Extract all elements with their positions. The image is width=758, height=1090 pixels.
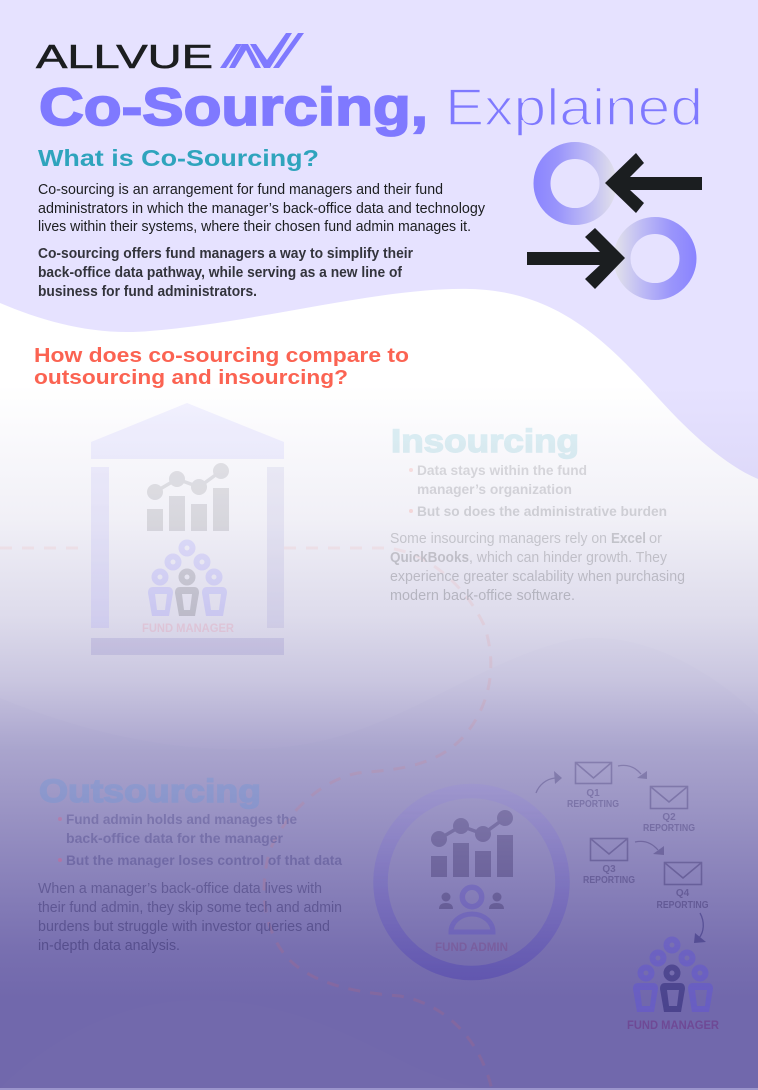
insourcing bullets: But so does the administrative burden <box>417 503 667 519</box>
outsourcing paragraph: in-depth data analysis. <box>38 938 180 954</box>
icon: fund admin ring <box>374 832 570 980</box>
outsourcing bullets: But the manager loses control of that data <box>66 852 342 868</box>
arrow: Q3 to Q4 <box>635 841 664 855</box>
outsourcing bullets: Fund admin holds and manages the <box>66 811 297 827</box>
bold paragraph <box>38 246 413 300</box>
outsourcing paragraph: burdens but struggle with investor queries and <box>38 919 330 935</box>
insourcing paragraph: , which can hinder growth. They <box>469 550 668 566</box>
icon: ring with inward arrow <box>542 150 702 216</box>
outsourcing paragraph <box>38 881 342 954</box>
icon: fund admin people <box>439 887 504 932</box>
icon: fund admin chart <box>431 810 513 877</box>
insourcing heading: Insourcing <box>391 423 579 459</box>
insourcing bullets: Data stays within the fund <box>417 462 587 478</box>
icon: ring with outward arrow <box>527 226 688 292</box>
title light part: Explained <box>445 79 703 137</box>
Q3 envelope and label <box>583 838 635 886</box>
bold paragraph: business for fund administrators. <box>38 284 257 300</box>
title <box>39 78 703 137</box>
section heading: what is co-sourcing: What is Co-Sourcing? <box>38 145 319 171</box>
definition paragraph <box>38 182 486 235</box>
logo <box>36 33 304 75</box>
outsourcing paragraph: their fund admin, they skip some tech and admin <box>38 900 342 916</box>
insourcing paragraph: modern back-office software. <box>390 588 575 604</box>
faded lower content <box>0 403 720 1090</box>
outsourcing heading: Outsourcing <box>39 773 261 809</box>
logo wordmark: ALLVUE <box>36 38 213 75</box>
bold paragraph: Co-sourcing offers fund managers a way to simplify their <box>38 246 413 262</box>
insourcing paragraph: Some insourcing managers rely on <box>390 531 607 547</box>
Q2 envelope and label <box>643 786 695 834</box>
panel: outsourcing <box>38 762 720 1032</box>
Q4 envelope and label: Q4 <box>676 888 690 899</box>
label: fund admin: FUND ADMIN <box>435 942 508 954</box>
icon: bank building <box>91 403 284 655</box>
comparison heading: How does co-sourcing compare to <box>34 345 409 367</box>
Q1 envelope and label <box>567 762 619 810</box>
icon: group of investors <box>148 542 227 616</box>
dashed connector path <box>0 548 492 1090</box>
arrow: Q1 to Q2 <box>618 765 647 779</box>
definition paragraph: lives within their systems, where their chosen fund admin manages it. <box>38 219 471 235</box>
logo mark <box>220 33 304 68</box>
Q3 envelope and label: REPORTING <box>583 875 635 886</box>
definition paragraph: Co-sourcing is an arrangement for fund managers and their fund <box>38 182 443 198</box>
insourcing paragraph: experience greater scalability when purchasing <box>390 569 685 585</box>
comparison heading <box>34 345 409 389</box>
Q1 envelope and label: REPORTING <box>567 799 619 810</box>
outsourcing paragraph: When a manager’s back-office data lives with <box>38 881 322 897</box>
arrow: Q4 to fund manager <box>694 913 706 943</box>
icon: bar and line chart <box>147 463 229 531</box>
outsourcing bullets: back-office data for the manager <box>66 830 284 846</box>
comparison heading: outsourcing and insourcing? <box>34 367 348 389</box>
insourcing paragraph: QuickBooks <box>390 550 469 566</box>
Q3 envelope and label: Q3 <box>602 864 616 875</box>
insourcing paragraph: Excel <box>611 531 646 547</box>
bold paragraph: back-office data pathway, while serving as a new line of <box>38 265 402 281</box>
Q2 envelope and label: Q2 <box>662 812 676 823</box>
panel: insourcing <box>91 403 685 655</box>
Q2 envelope and label: REPORTING <box>643 823 695 834</box>
definition paragraph: administrators in which the manager’s back-office data and technology <box>38 201 486 217</box>
label: fund manager: FUND MANAGER <box>142 623 235 635</box>
Q4 envelope and label <box>656 862 709 911</box>
label: fund manager: FUND MANAGER <box>627 1020 720 1032</box>
Q4 envelope and label: REPORTING <box>656 900 709 911</box>
reporting flow <box>536 762 709 943</box>
outsourcing bullets <box>58 811 342 868</box>
Q1 envelope and label: Q1 <box>586 788 600 799</box>
insourcing paragraph <box>390 531 685 604</box>
insourcing paragraph: or <box>649 531 662 547</box>
title bold part: Co-Sourcing, <box>39 78 428 137</box>
insourcing bullets <box>409 462 667 519</box>
insourcing bullets: manager’s organization <box>417 481 572 497</box>
icon: fund manager group <box>633 940 713 1012</box>
arrow: admin to Q1 <box>536 771 562 793</box>
